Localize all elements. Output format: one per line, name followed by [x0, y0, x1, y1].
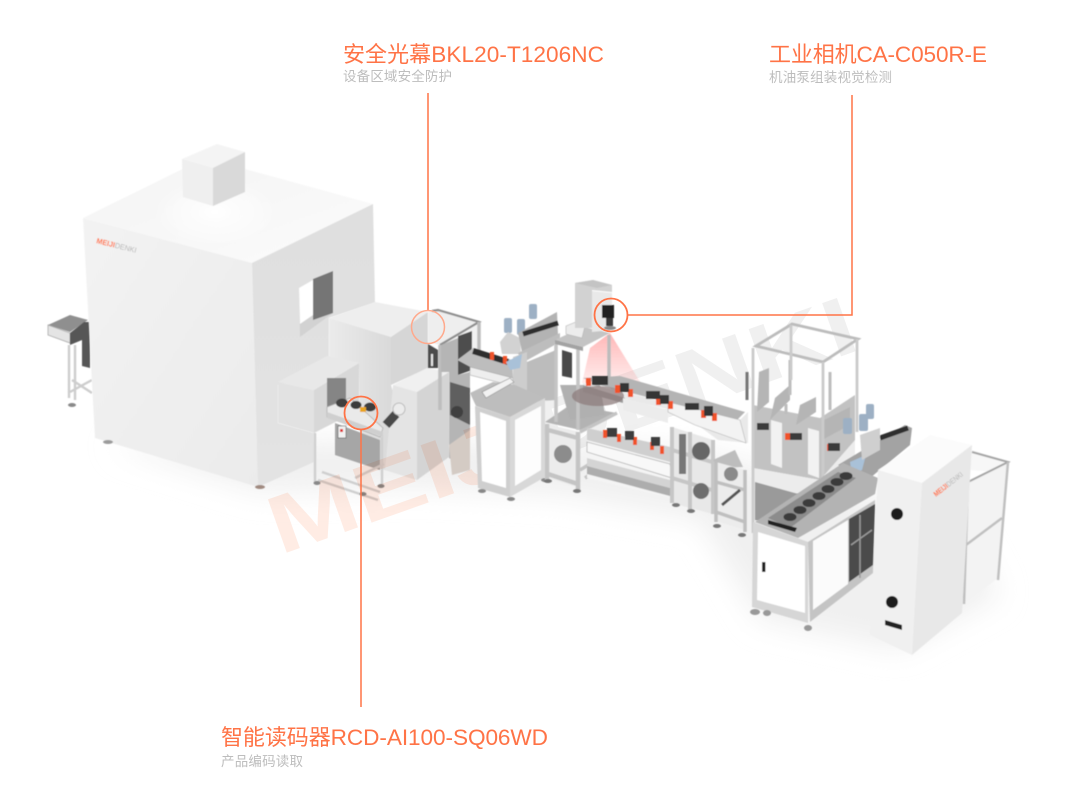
camera tower [575, 280, 612, 328]
leader line [360, 430, 362, 707]
enclosure right face [252, 204, 375, 487]
enclosure top face [83, 158, 373, 263]
subheading: 产品编码读取 [221, 754, 304, 769]
heading: 安全光幕BKL20-T1206NC [343, 42, 604, 67]
small left hood [278, 356, 359, 390]
workpieces on upper conveyor [586, 378, 717, 421]
heading: 智能读码器RCD-AI100-SQ06WD [221, 725, 548, 750]
window opening [299, 271, 333, 337]
watermark: MEIJI DENKI [256, 280, 869, 572]
tall white control cabinet: MEIJIDENKI [932, 470, 965, 499]
glass frame [756, 324, 858, 362]
camera gantry and red light [544, 280, 642, 493]
barcode conveyor station [314, 398, 405, 500]
logo on enclosure: MEIJIDENKI [96, 236, 137, 255]
outfeed cabinet and tray conveyor [750, 404, 1008, 655]
feeder conveyor with motors [457, 304, 560, 402]
callout: safety light curtain [343, 42, 604, 344]
assembly station one [457, 304, 560, 501]
stand cabinet [470, 378, 549, 501]
marker circle [594, 298, 628, 332]
rear rack [964, 450, 1008, 604]
heading: 工业相机CA-C050R-E [769, 42, 987, 67]
side sensor [746, 372, 748, 400]
lower return conveyor and frames [587, 427, 746, 537]
upper rail and motors [838, 404, 912, 478]
subheading: 机油泵组装视觉检测 [769, 70, 892, 85]
main white enclosure [83, 144, 375, 489]
middle housing [329, 302, 428, 337]
angled plates [757, 368, 850, 440]
tray deck [755, 463, 878, 538]
subheading: 设备区域安全防护 [343, 68, 452, 84]
guard frame behind housing [428, 310, 479, 475]
marker circle [412, 310, 444, 344]
main transfer conveyor [572, 376, 748, 443]
small cabinet frame [713, 450, 746, 537]
inspection table frame [544, 385, 617, 493]
chimney box [182, 144, 245, 206]
callout: industrial camera [594, 42, 987, 332]
cup rows [784, 472, 852, 521]
leader line [628, 95, 852, 315]
left infeed conveyor [48, 315, 92, 407]
tall white control cabinet [870, 435, 972, 655]
gantry posts [556, 342, 578, 430]
callout: smart code reader [221, 396, 548, 769]
lower right housing [393, 368, 449, 392]
marker circle [344, 396, 378, 430]
glass guarded station [747, 324, 858, 533]
end frame [672, 427, 713, 514]
red light cone [582, 333, 642, 385]
base cabinet [752, 522, 808, 623]
stepped white housings [278, 302, 449, 500]
leader line [427, 93, 429, 311]
floor shadow [110, 440, 1000, 650]
enclosure left face [83, 218, 258, 487]
camera body [602, 305, 614, 318]
